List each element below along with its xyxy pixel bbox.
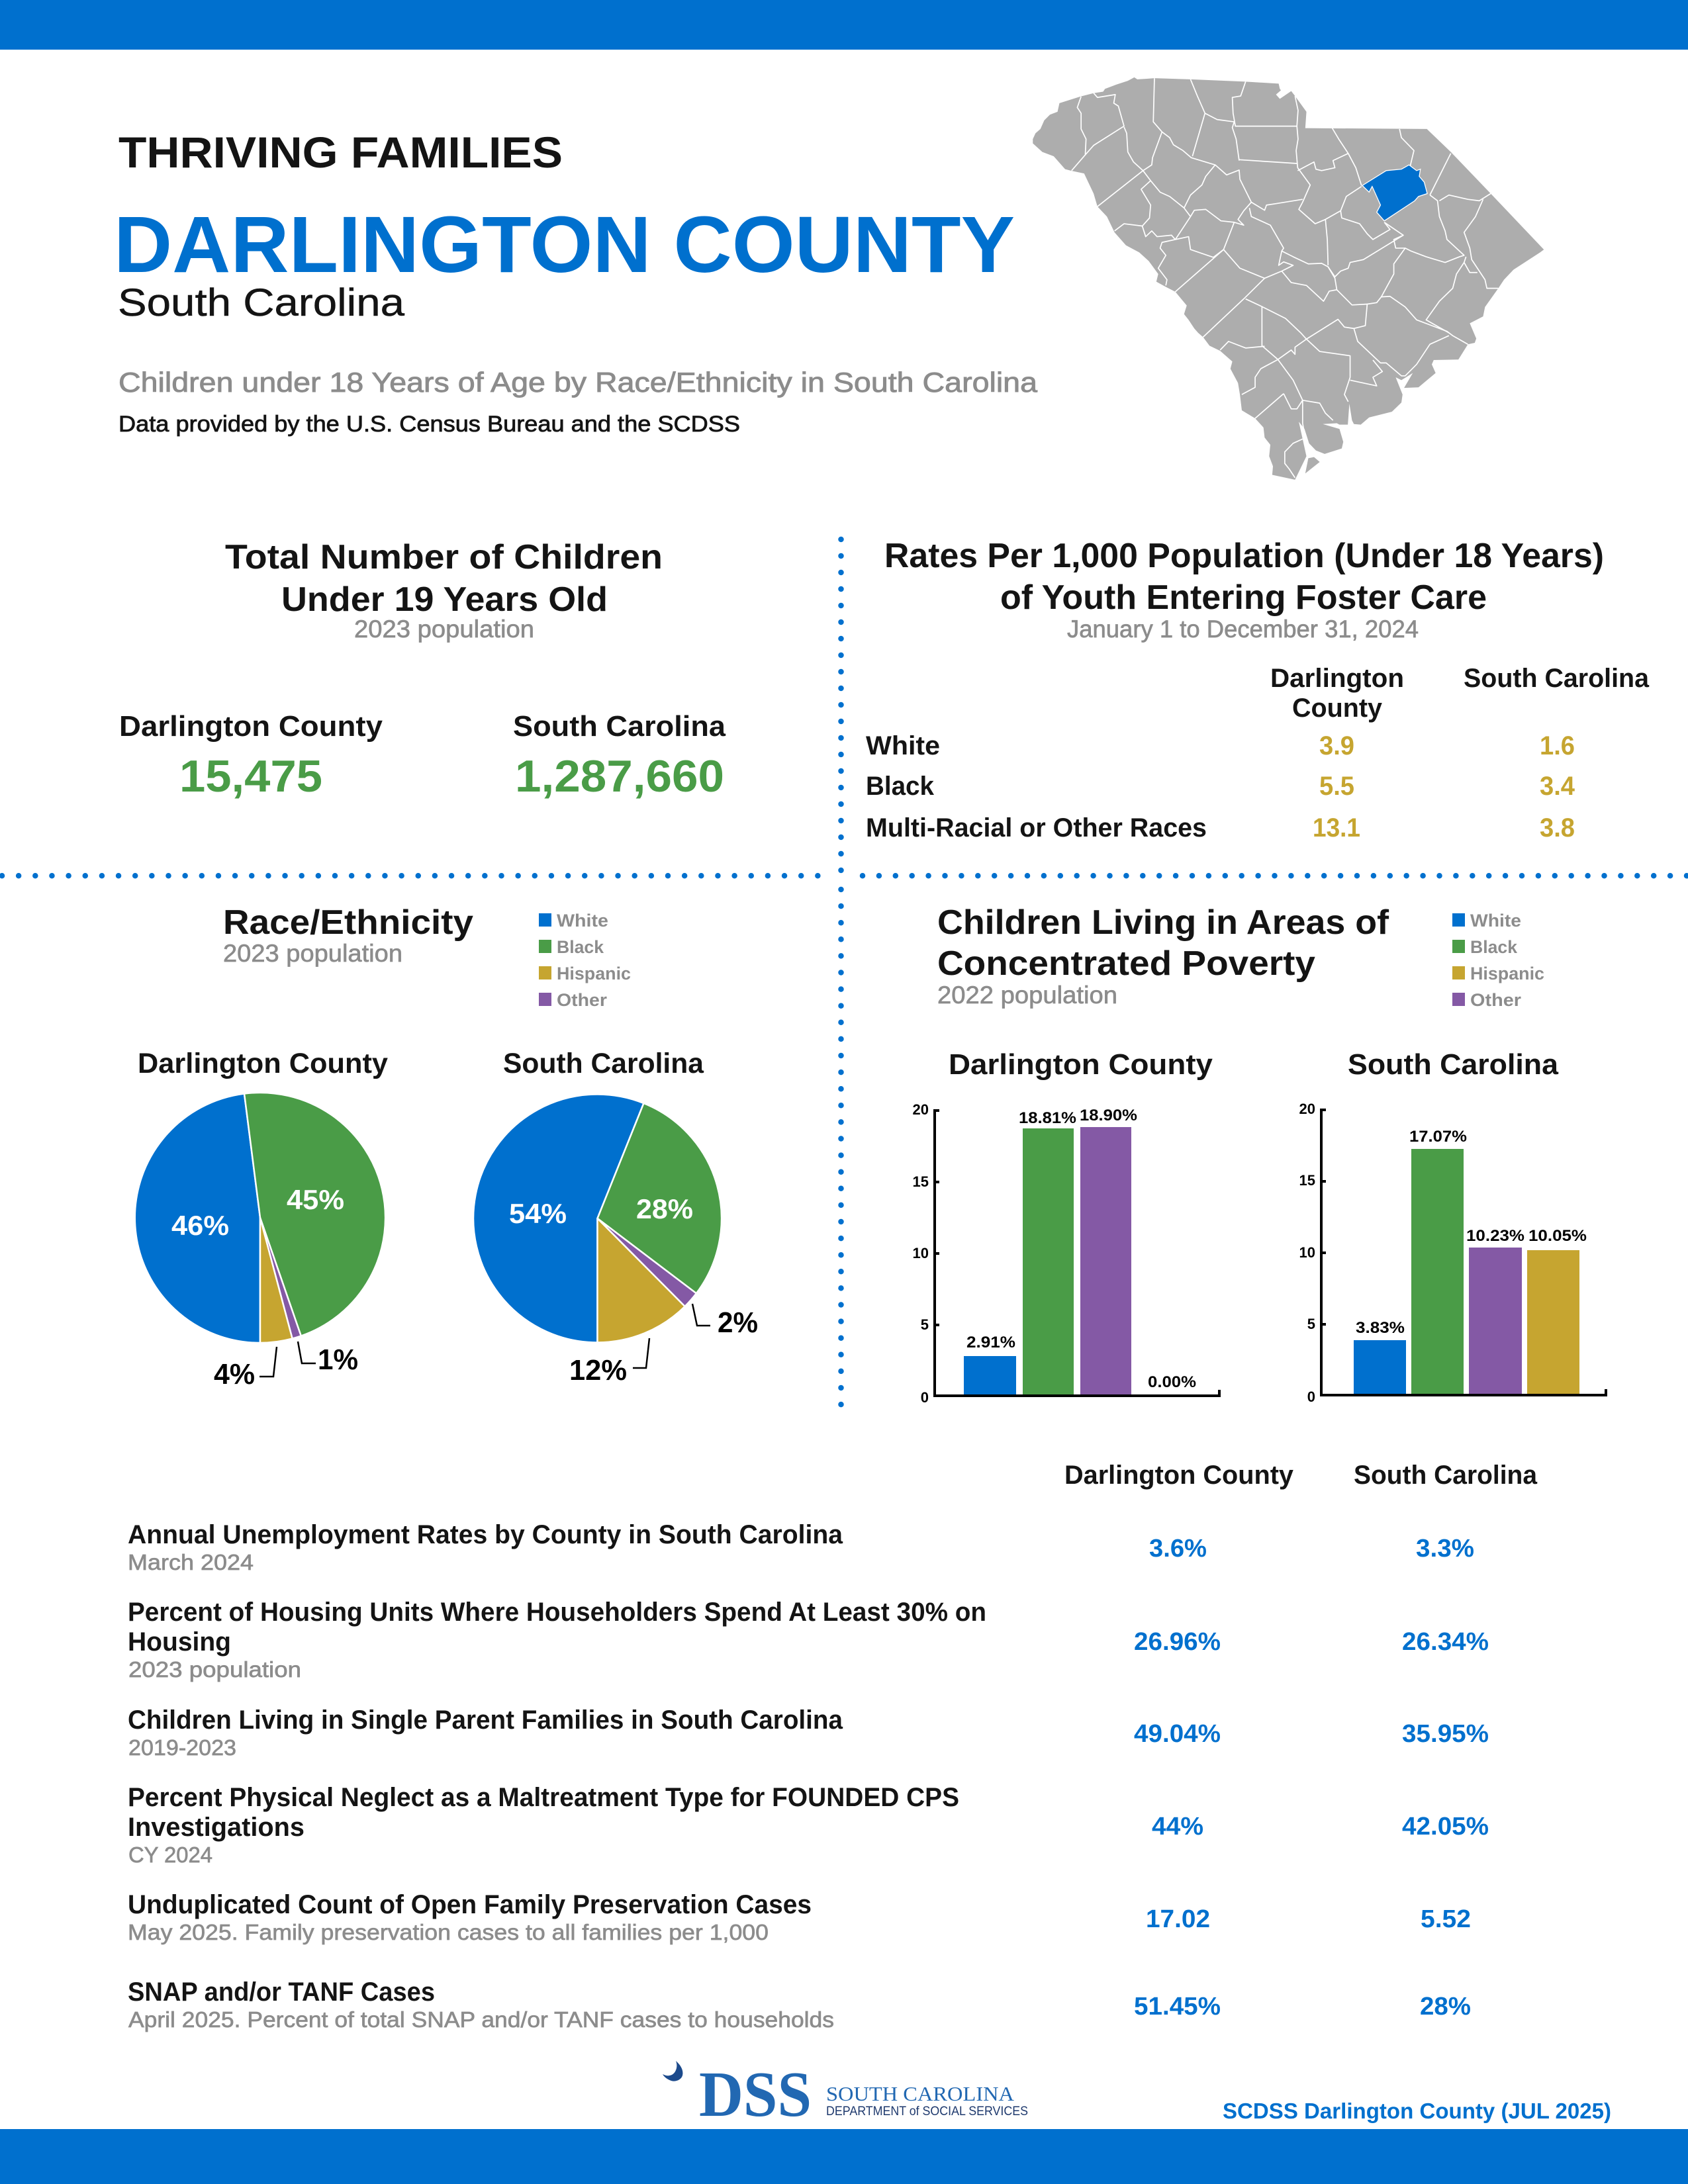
pie chart: Darlington County: 1% [318,1343,358,1376]
row: SNAP and TANF: 51.45% [1134,1993,1221,2021]
logo: SC DSS: DEPARTMENT of SOCIAL SERVICES [826,2105,1028,2118]
column headers: Darlington [1270,664,1404,693]
main title: DARLINGTON COUNTY [114,199,1015,289]
header text block [114,128,1038,437]
bar chart: South Carolina [1299,1048,1606,1405]
logo: SC DSS [663,2059,1028,2130]
legend: Other [1470,990,1522,1010]
pie chart: Darlington County: 4% [214,1358,255,1390]
Darlington County total: Darlington County [119,710,383,743]
row: White: White [866,731,940,760]
row: Black: 3.4 [1540,772,1575,801]
eyebrow title: THRIVING FAMILIES [118,128,563,177]
bar chart: Darlington County: 0.00% [1148,1373,1196,1391]
bar chart: South Carolina: 15 [1299,1172,1315,1189]
subheading: January 1 to December 31, 2024 [1067,615,1419,643]
heading: Children Living in Areas of [937,903,1389,942]
row: unemployment: 3.6% [1149,1535,1207,1563]
top banner [0,0,1688,50]
row: unemployment: 3.3% [1416,1535,1474,1563]
logo: SC DSS: SOUTH CAROLINA [826,2082,1015,2105]
bar chart: Darlington County [913,1048,1219,1406]
bar chart: South Carolina: 17.07% [1409,1128,1467,1146]
row: SNAP and TANF: 28% [1420,1993,1471,2021]
pie chart: Darlington County: Darlington County [138,1048,388,1079]
row: Multi-Racial [866,813,1575,842]
bar chart: South Carolina: 10.23% [1466,1227,1524,1245]
heading [884,537,1604,617]
dotted dividers [2,539,1688,1406]
heading: Rates Per 1,000 Population (Under 18 Years) [884,537,1604,575]
row: housing: 2023 population [128,1657,301,1682]
subheading: 2022 population [937,981,1117,1009]
bar chart: Darlington County: 10 [913,1245,929,1261]
row: Black: 5.5 [1319,772,1354,801]
row: housing [128,1598,1489,1682]
pie chart: Darlington County: 45% [287,1184,344,1215]
row: family preservation: May 2025. Family preservation cases to all families per 1,000 [128,1920,769,1944]
row: physical neglect: CY 2024 [128,1843,212,1867]
heading: Total Number of Children [225,538,663,576]
legend: White [557,911,608,931]
bar chart: South Carolina: 10 [1299,1244,1315,1261]
row: SNAP and TANF [128,1978,1471,2032]
legend: White [1470,911,1521,931]
panel: total number of children [119,538,726,801]
pie chart: Darlington County: 46% [171,1210,229,1241]
row: SNAP and TANF: SNAP and/or TANF Cases [128,1978,435,2007]
heading: Under 19 Years Old [281,580,608,619]
row: family preservation [128,1890,1471,1944]
heading: Concentrated Poverty [937,944,1315,983]
legend: Hispanic [557,964,631,983]
bar chart: Darlington County: 5 [921,1316,929,1333]
row: single parent families: 35.95% [1402,1720,1489,1748]
column headers: South Carolina [1464,664,1650,693]
legend: Black [557,937,604,957]
bar chart: South Carolina: 5 [1307,1316,1315,1332]
legend: Black [1470,937,1518,957]
panel: race and ethnicity [135,903,758,1390]
row: Black: Black [866,772,935,801]
column headers: County [1292,694,1383,723]
row: SNAP and TANF: April 2025. Percent of total SNAP and/or TANF cases to households [128,2007,834,2032]
row: Multi-Racial: 13.1 [1313,813,1360,842]
state subtitle: South Carolina [118,281,405,324]
row: unemployment: March 2024 [128,1550,254,1574]
South Carolina total: South Carolina [513,710,726,743]
pie chart: Darlington County [135,1048,388,1390]
heading: Race/Ethnicity [223,903,473,942]
row: White: 1.6 [1540,731,1575,760]
row: Black [866,772,1575,801]
pie chart: South Carolina: 12% [569,1354,627,1387]
Darlington County total [119,710,383,801]
panel: concentrated poverty [913,903,1606,1406]
row: single parent families [128,1706,1489,1760]
Darlington County total: 15,475 [179,751,322,801]
column headers [1064,1461,1538,1490]
bar chart: South Carolina: 10.05% [1528,1227,1587,1245]
map of South Carolina counties [1033,77,1544,480]
row: single parent families: Children Living in Single Parent Families in South Carolina [128,1706,843,1735]
legend [1452,911,1544,1010]
row: family preservation: 5.52 [1421,1905,1471,1933]
row: family preservation: 17.02 [1146,1905,1210,1933]
row: unemployment: Annual Unemployment Rates by County in South Carolina [128,1520,843,1549]
bar chart: South Carolina: 0 [1307,1388,1315,1405]
legend [539,911,631,1010]
subheading: 2023 population [223,940,402,967]
row: housing: 26.34% [1402,1628,1489,1656]
bar chart: Darlington County: 0 [921,1389,929,1406]
row: single parent families: 2019-2023 [128,1735,236,1760]
bar chart: Darlington County: Darlington County [949,1048,1213,1081]
column headers: Darlington County [1064,1461,1294,1490]
pie chart: South Carolina [473,1048,758,1387]
data source: Data provided by the U.S. Census Bureau and the SCDSS [118,412,740,437]
logo: SC DSS: DSS [699,2059,812,2130]
bottom banner [0,2129,1688,2184]
South Carolina total [513,710,726,801]
pie chart: South Carolina: South Carolina [503,1048,704,1079]
row: housing: Percent of Housing Units Where Householders Spend At Least 30% on [128,1598,986,1627]
description: Children under 18 Years of Age by Race/Ethnicity in South Carolina [118,367,1038,398]
row: Multi-Racial: 3.8 [1540,813,1575,842]
row: physical neglect: Percent Physical Neglect as a Maltreatment Type for FOUNDED CPS [128,1783,959,1812]
row: physical neglect: 42.05% [1402,1813,1489,1841]
row: White [866,731,1575,760]
row: physical neglect: 44% [1152,1813,1203,1841]
subheading: 2023 population [354,615,534,643]
bar chart: South Carolina: 20 [1299,1101,1315,1117]
column headers: South Carolina [1354,1461,1538,1490]
panel: indicators table [128,1461,1538,2032]
pie chart: South Carolina: 54% [509,1198,567,1229]
legend: Hispanic [1470,964,1544,983]
bar chart: Darlington County: 2.91% [966,1334,1015,1351]
row: White: 3.9 [1319,731,1354,760]
South Carolina total: 1,287,660 [515,751,724,801]
legend: Other [557,990,608,1010]
row: single parent families: 49.04% [1134,1720,1221,1748]
row: physical neglect: Investigations [128,1813,305,1842]
panel: foster care rates [866,537,1650,842]
bar chart: South Carolina: 3.83% [1356,1319,1405,1337]
heading [937,903,1389,983]
column headers [1270,664,1650,723]
row: family preservation: Unduplicated Count of Open Family Preservation Cases [128,1890,812,1919]
pie chart: South Carolina: 2% [718,1306,758,1339]
bar chart: South Carolina: South Carolina [1348,1048,1559,1081]
row: housing: Housing [128,1627,231,1657]
row: unemployment [128,1520,1474,1574]
heading [225,538,663,619]
footer credit: SCDSS Darlington County (JUL 2025) [1223,2099,1611,2123]
bar chart: Darlington County: 18.90% [1080,1107,1137,1124]
bar chart: Darlington County: 20 [913,1101,929,1118]
row: physical neglect [128,1783,1489,1867]
bar chart: Darlington County: 18.81% [1019,1109,1076,1127]
pie chart: South Carolina: 28% [636,1193,693,1224]
icon: crescent moon [663,2061,682,2081]
row: housing: 26.96% [1134,1628,1221,1656]
heading: of Youth Entering Foster Care [1000,578,1487,617]
bar chart: Darlington County: 15 [913,1173,929,1190]
highlighted Darlington County [1362,165,1427,221]
row: Multi-Racial: Multi-Racial or Other Races [866,813,1207,842]
